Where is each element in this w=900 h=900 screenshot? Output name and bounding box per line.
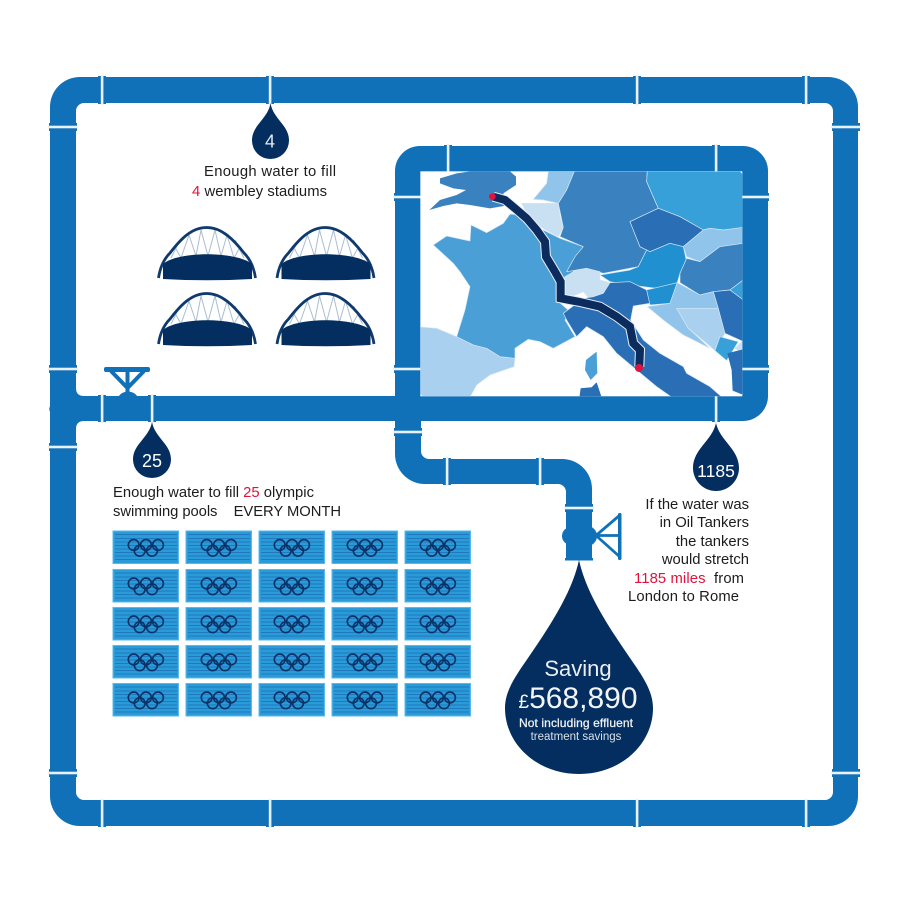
pipe joints	[48, 75, 861, 828]
panel: stadiums	[158, 103, 374, 346]
pipe network	[48, 75, 861, 828]
drop: 1185: 1185	[697, 461, 735, 481]
map: UK	[429, 170, 516, 210]
tanker text: in Oil Tankers	[660, 515, 749, 531]
map pipe frame	[72, 146, 768, 560]
map: Kosovo	[734, 340, 742, 354]
map: Slovakia	[683, 227, 743, 262]
map: Belgium	[522, 203, 563, 237]
map: Hungary and Romania	[680, 243, 743, 295]
map: Corsica	[585, 352, 597, 380]
infographic	[48, 75, 861, 828]
icon: outlet valve	[562, 513, 622, 560]
tanker text: the tankers	[676, 534, 749, 550]
map: Czech Republic	[630, 208, 703, 252]
icons: four wembley stadiums	[158, 228, 374, 346]
panel: olympic pools	[113, 422, 470, 716]
map: Rome marker	[635, 364, 643, 372]
map: Germany	[558, 171, 658, 273]
stadium text: Enough water to fill	[204, 164, 336, 180]
drop: 25	[133, 422, 171, 478]
map: Austria	[600, 243, 687, 288]
map: Montenegro	[715, 337, 738, 361]
tanker text: London to Rome	[628, 589, 739, 605]
map: Netherlands	[533, 171, 574, 203]
map: route line	[493, 197, 640, 367]
drop: 1185	[693, 423, 739, 491]
map: Albania	[727, 349, 743, 395]
map: Sardinia	[580, 382, 602, 396]
callout: saving drop: £568,890	[518, 682, 638, 715]
drop: 25: 25	[142, 451, 162, 471]
icons: 25 olympic pools	[113, 531, 470, 716]
stadium text: 4 wembley stadiums	[192, 184, 327, 200]
outer pipe loop	[50, 77, 858, 826]
callout: saving drop: Not including effluent	[519, 716, 634, 730]
tee junction fillets	[49, 388, 84, 429]
tanker text: 1185 miles from	[634, 571, 744, 587]
pool text: Enough water to fill 25 olympic	[113, 485, 315, 501]
map: Italy	[563, 282, 723, 398]
callout: saving drop: Saving	[544, 656, 612, 681]
map: Switzerland	[564, 268, 610, 298]
icon: top valve	[104, 367, 150, 397]
callout: saving drop	[505, 560, 653, 774]
map: Croatia	[647, 283, 718, 348]
pool text: swimming pools EVERY MONTH	[113, 504, 341, 520]
map: London marker	[489, 193, 496, 200]
tanker text: would stretch	[661, 552, 749, 568]
tanker text: If the water was	[645, 497, 749, 513]
map: Poland	[647, 171, 743, 230]
map: France	[433, 214, 583, 358]
map: east edge	[730, 280, 742, 299]
tanker text	[628, 497, 749, 605]
map: London to Rome route	[417, 170, 743, 398]
drop: 4: 4	[265, 132, 275, 152]
map: Spain	[417, 327, 515, 398]
map: Serbia	[713, 290, 743, 342]
map: Bosnia	[677, 308, 725, 351]
pool text	[113, 485, 341, 520]
map: Slovenia	[647, 283, 677, 305]
drop: 4	[252, 103, 289, 159]
callout: saving drop: treatment savings	[531, 731, 622, 743]
stadium text	[192, 164, 336, 200]
panel: oil tankers	[628, 423, 749, 605]
